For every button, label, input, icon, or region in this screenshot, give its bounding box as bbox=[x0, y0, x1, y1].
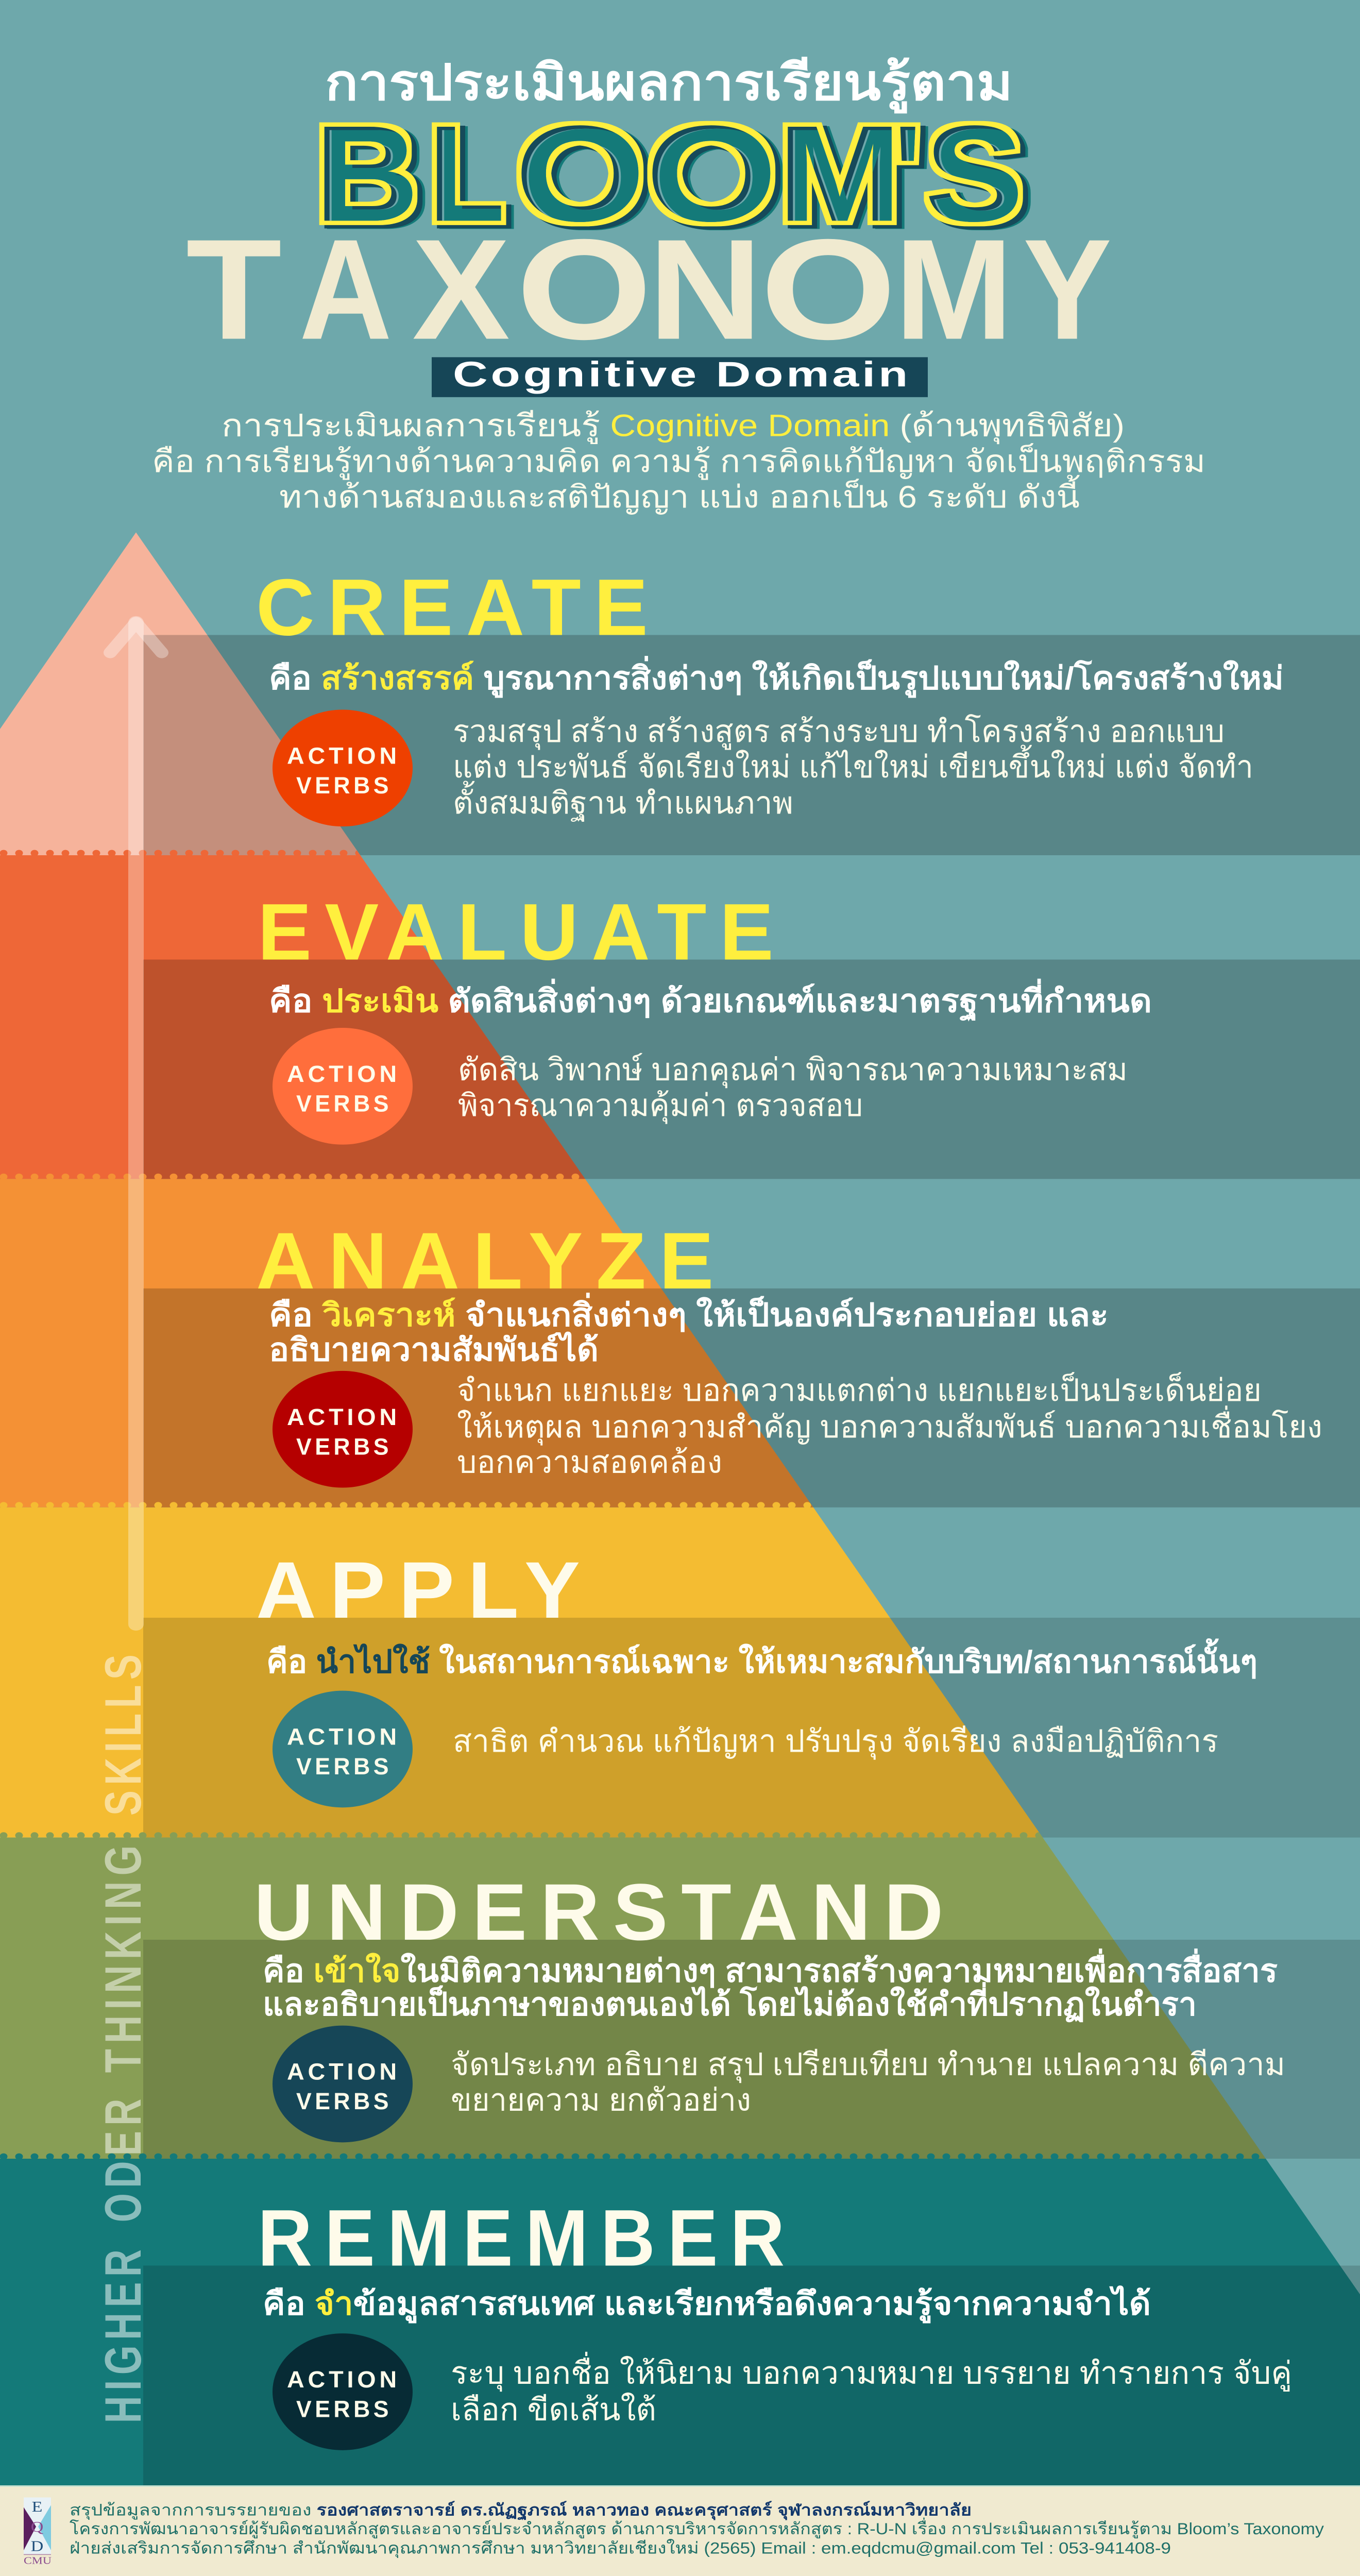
title: BLOOM'S: B bbox=[315, 97, 419, 250]
level: create bbox=[256, 563, 1284, 826]
verbs list: create: รวมสรุป สร้าง สร้างสูตร สร้างระบบ ทำโครงสร้าง ออกแบบ bbox=[453, 714, 1225, 750]
heading: create: CREATE bbox=[256, 563, 661, 652]
action verbs badge: evaluate: ACTION bbox=[287, 1060, 400, 1087]
verbs list: understand bbox=[451, 2047, 1285, 2117]
vertical label: higher order thinking skills: HIGHER bbox=[95, 2244, 152, 2423]
vertical label: higher order thinking skills: ODER bbox=[95, 2093, 152, 2222]
title: TAXONOMY: A bbox=[299, 210, 392, 369]
footer credits: ฝ่ายส่งเสริมการจัดการศึกษา สำนักพัฒนาคุณภาพการศึกษา มหาวิทยาลัยเชียงใหม่ (2565) Email : em.eqdcmu@gmail.com Tel : 053-941408-9 bbox=[70, 2539, 1171, 2558]
vertical label: higher order thinking skills: THINKING bbox=[95, 1840, 152, 2073]
heading: understand: UNDERSTAND bbox=[254, 1868, 957, 1957]
definition: evaluate: คือ ประเมิน ตัดสินสิ่งต่างๆ ด้วยเกณฑ์และมาตรฐานที่กำหนด bbox=[269, 978, 1152, 1022]
title: BLOOM'S: ' bbox=[894, 97, 921, 250]
pyramid tier: apply bbox=[0, 1507, 1043, 1838]
verbs list: create bbox=[453, 714, 1253, 822]
subtitle badge: cognitive domain: Cognitive Domain bbox=[453, 354, 911, 394]
title: TAXONOMY: O bbox=[760, 210, 896, 369]
action verbs badge: apply: ACTION bbox=[287, 1723, 400, 1750]
action verbs badge: create: ACTION bbox=[287, 742, 400, 769]
logo: EQD CMU: Q bbox=[31, 2519, 44, 2535]
verbs list: analyze: บอกความสอดคล้อง bbox=[457, 1445, 722, 1480]
intro paragraph: คือ การเรียนรู้ทางด้านความคิด ความรู้ การคิดแก้ปัญหา จัดเป็นพฤติกรรม bbox=[152, 443, 1205, 480]
verbs list: remember bbox=[451, 2351, 1292, 2427]
action verbs badge: analyze bbox=[273, 1371, 413, 1488]
title: thai heading: การประเมินผลการเรียนรู้ตาม bbox=[325, 55, 1013, 113]
action verbs badge: remember: ACTION bbox=[287, 2366, 400, 2393]
action verbs badge: understand: ACTION bbox=[287, 2058, 400, 2085]
title: TAXONOMY: O bbox=[516, 210, 652, 369]
pyramid bbox=[0, 532, 1360, 2485]
action verbs badge: evaluate: VERBS bbox=[296, 1090, 392, 1116]
title: BLOOM'S: O bbox=[515, 97, 645, 250]
action verbs badge: understand bbox=[273, 2026, 413, 2142]
definition: analyze: อธิบายความสัมพันธ์ได้ bbox=[269, 1331, 599, 1367]
title: BLOOM'S: M bbox=[778, 97, 902, 250]
vertical label: higher order thinking skills: SKILLS bbox=[95, 1649, 152, 1816]
pyramid tier: analyze bbox=[0, 1179, 813, 1507]
logo: EQD CMU: E bbox=[32, 2499, 42, 2515]
pyramid tier: understand bbox=[0, 1838, 1360, 2159]
verbs list: apply: สาธิต คำนวณ แก้ปัญหา ปรับปรุง จัดเรียง ลงมือปฏิบัติการ bbox=[453, 1724, 1218, 1760]
title: TAXONOMY: T bbox=[186, 210, 282, 369]
arrow: upward higher order thinking bbox=[110, 622, 162, 1624]
pyramid tier: evaluate bbox=[0, 855, 585, 1179]
title: TAXONOMY: M bbox=[895, 210, 1013, 369]
heading: remember: REMEMBER bbox=[258, 2193, 797, 2283]
heading: apply: APPLY bbox=[256, 1546, 593, 1635]
footer credits bbox=[70, 2501, 1324, 2558]
pyramid tier: remember bbox=[0, 2159, 1360, 2485]
definition: analyze: คือ วิเคราะห์ จำแนกสิ่งต่างๆ ให้เป็นองค์ประกอบย่อย และ bbox=[269, 1292, 1109, 1333]
definition: remember: คือ จำข้อมูลสารสนเทศ และเรียกหรือดึงความรู้จากความจำได้ bbox=[263, 2285, 1151, 2324]
verbs list: understand: ขยายความ ยกตัวอย่าง bbox=[451, 2083, 751, 2117]
title: BLOOM'S: L bbox=[429, 97, 505, 250]
title: BLOOM'S: O bbox=[645, 97, 777, 250]
action verbs badge: understand: VERBS bbox=[296, 2088, 392, 2114]
intro paragraph: การประเมินผลการเรียนรู้ Cognitive Domain (ด้านพุทธิพิสัย) bbox=[222, 409, 1125, 445]
footer panel bbox=[0, 2485, 1360, 2576]
heading: analyze: ANALYZE bbox=[256, 1216, 727, 1306]
heading: evaluate: EVALUATE bbox=[258, 887, 787, 977]
verbs list: analyze bbox=[457, 1372, 1322, 1480]
title: TAXONOMY bbox=[186, 210, 1112, 369]
action verbs badge: create: VERBS bbox=[296, 772, 392, 799]
action verbs badge: remember bbox=[273, 2333, 413, 2450]
definition: understand: และอธิบายเป็นภาษาของตนเองได้ โดยไม่ต้องใช้คำที่ปรากฏในตำรา bbox=[263, 1981, 1197, 2022]
action verbs badge: apply bbox=[273, 1691, 413, 1807]
verbs list: evaluate: พิจารณาความคุ้มค่า ตรวจสอบ bbox=[458, 1088, 863, 1124]
definition: create: คือ สร้างสรรค์ บูรณาการสิ่งต่างๆ ให้เกิดเป็นรูปแบบใหม่/โครงสร้างใหม่ bbox=[269, 655, 1284, 699]
level: understand bbox=[254, 1868, 1285, 2142]
vertical label: higher order thinking skills bbox=[95, 1649, 152, 2423]
logo: EQD CMU: CMU bbox=[24, 2555, 52, 2566]
level: analyze bbox=[256, 1216, 1322, 1488]
action verbs badge: remember: VERBS bbox=[296, 2396, 392, 2422]
title: TAXONOMY: N bbox=[648, 210, 762, 369]
level: remember bbox=[258, 2193, 1292, 2450]
action verbs badge: analyze: VERBS bbox=[296, 1433, 392, 1460]
intro paragraph bbox=[152, 409, 1205, 515]
verbs list: evaluate bbox=[458, 1053, 1128, 1124]
action verbs badge: analyze: ACTION bbox=[287, 1403, 400, 1430]
action verbs badge: create bbox=[273, 710, 413, 826]
logo: EQD CMU bbox=[24, 2498, 52, 2566]
verbs list: create: ตั้งสมมติฐาน ทำแผนภาพ bbox=[453, 781, 793, 822]
verbs list: evaluate: ตัดสิน วิพากษ์ บอกคุณค่า พิจารณาความเหมาะสม bbox=[458, 1053, 1128, 1089]
definition: analyze bbox=[269, 1292, 1109, 1367]
action verbs badge: apply: VERBS bbox=[296, 1753, 392, 1780]
verbs list: remember: เลือก ขีดเส้นใต้ bbox=[451, 2392, 656, 2427]
title: BLOOM'S: S bbox=[925, 97, 1024, 250]
footer credits: สรุปข้อมูลจากการบรรยายของ รองศาสตราจารย์ ดร.ณัฏฐภรณ์ หลาวทอง คณะครุศาสตร์ จุฬาลงกรณ์มหาวิทยาลัย bbox=[70, 2501, 972, 2520]
intro paragraph: ทางด้านสมองและสติปัญญา แบ่ง ออกเป็น 6 ระดับ ดังนี้ bbox=[279, 474, 1080, 515]
level: apply bbox=[256, 1546, 1257, 1807]
logo: EQD CMU: D bbox=[31, 2538, 43, 2554]
title: TAXONOMY: X bbox=[412, 210, 511, 369]
dark text bands bbox=[143, 635, 1360, 2485]
title: TAXONOMY: Y bbox=[1023, 210, 1112, 369]
level: evaluate bbox=[258, 887, 1152, 1145]
definition: understand bbox=[263, 1948, 1278, 2022]
title: BLOOM'S bbox=[315, 97, 1024, 250]
action verbs badge: evaluate bbox=[273, 1028, 413, 1145]
pyramid tier: create bbox=[0, 533, 361, 855]
